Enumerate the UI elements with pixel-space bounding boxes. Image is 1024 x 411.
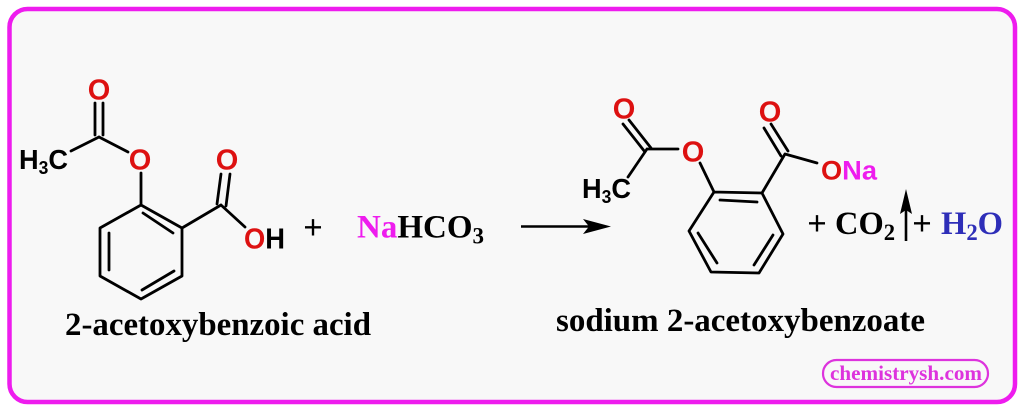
- molecule: 2-acetoxybenzoic acid: O: [216, 144, 238, 176]
- molecule: 2-acetoxybenzoic acid: C: [48, 144, 68, 175]
- reagent: NaHCO3: NaHCO: [357, 210, 473, 246]
- molecule: sodium 2-acetoxybenzoate: 3: [602, 187, 611, 207]
- product: H2O: H: [941, 206, 967, 242]
- label: product name: sodium 2-acetoxybenzoate: [556, 303, 925, 339]
- product: H2O: O: [978, 206, 1003, 242]
- gas arrow: [900, 189, 912, 241]
- plus sign: +: [303, 208, 323, 246]
- molecule: 2-acetoxybenzoic acid: O: [129, 144, 151, 176]
- molecule: sodium 2-acetoxybenzoate: O: [759, 96, 781, 128]
- product: H2O: 2: [966, 220, 978, 245]
- molecule: sodium 2-acetoxybenzoate: O: [682, 136, 704, 168]
- molecule: sodium 2-acetoxybenzoate: H: [582, 173, 602, 204]
- molecule: 2-acetoxybenzoic acid: O: [88, 74, 110, 106]
- molecule: 2-acetoxybenzoic acid: OH: [244, 224, 285, 256]
- plus sign: +: [912, 204, 932, 242]
- molecule: sodium 2-acetoxybenzoate: ONa: [821, 156, 878, 186]
- molecule: sodium 2-acetoxybenzoate: C: [611, 173, 631, 204]
- product: CO2: 2: [884, 220, 895, 245]
- product: CO2: CO: [835, 206, 884, 242]
- molecule: sodium 2-acetoxybenzoate: O: [613, 94, 635, 126]
- watermark: chemistrysh.com: chemistrysh.com: [830, 361, 982, 385]
- molecule: 2-acetoxybenzoic acid: [19, 74, 285, 299]
- molecule: 2-acetoxybenzoic acid: 3: [39, 158, 48, 178]
- molecule: sodium 2-acetoxybenzoate: [582, 94, 878, 273]
- label: reactant name: 2-acetoxybenzoic acid: [65, 307, 371, 343]
- plus sign: +: [807, 204, 827, 242]
- reaction arrow: [521, 219, 611, 234]
- reagent: NaHCO3: 3: [473, 224, 484, 248]
- molecule: 2-acetoxybenzoic acid: H: [19, 144, 39, 175]
